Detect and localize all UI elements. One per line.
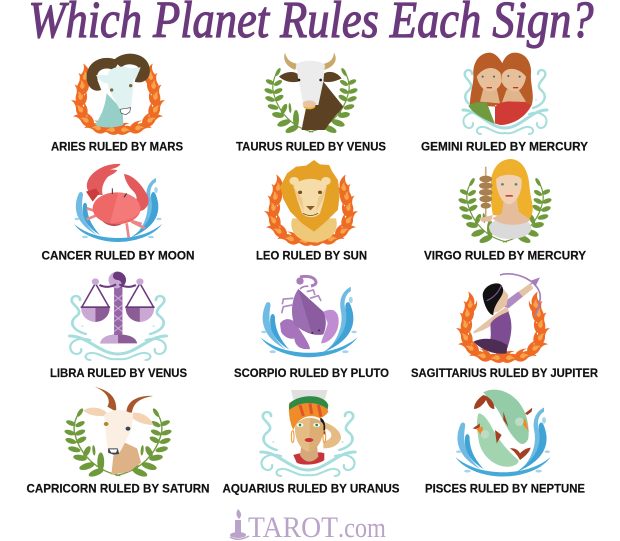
panel: libra <box>50 272 187 380</box>
wreath: water <box>261 287 357 357</box>
icon: two fish <box>473 390 532 467</box>
panel: sagittarius <box>411 274 598 380</box>
wreath: laurel <box>264 67 358 135</box>
panel: aquarius <box>222 390 400 496</box>
label: CANCER RULED BY MOON <box>42 249 194 263</box>
icon: ram <box>92 59 144 127</box>
icon: archer <box>473 274 540 354</box>
wreath: flames <box>263 174 359 247</box>
label: GEMINI RULED BY MERCURY <box>421 140 588 154</box>
wreath: swirls <box>70 296 166 360</box>
label: LEO RULED BY SUN <box>256 249 367 263</box>
icon: crab <box>86 164 149 237</box>
panel: virgo <box>424 159 586 263</box>
label: ARIES RULED BY MARS <box>51 140 183 154</box>
label: CAPRICORN RULED BY SATURN <box>26 482 210 496</box>
label: AQUARIUS RULED BY URANUS <box>222 482 400 496</box>
panel: cancer <box>42 164 194 263</box>
label: LIBRA RULED BY VENUS <box>50 366 187 380</box>
panel: aries <box>51 59 183 154</box>
panel: taurus <box>236 53 386 154</box>
icon: lion <box>280 160 340 242</box>
icon: candle <box>230 509 249 539</box>
label: SCORPIO RULED BY PLUTO <box>234 366 389 380</box>
wreath: flames <box>455 291 551 364</box>
panel: capricorn <box>26 387 210 496</box>
label: SAGITTARIUS RULED BY JUPITER <box>411 366 598 380</box>
icon: bull <box>279 53 343 130</box>
icon: water bearer <box>289 390 341 465</box>
panel: pisces <box>425 390 585 496</box>
panel: leo <box>256 160 367 263</box>
wreath: water <box>455 407 551 477</box>
wreath: laurel <box>458 177 552 245</box>
wreath: laurel <box>64 408 172 478</box>
icon: goat <box>83 387 153 475</box>
wreath: flames <box>70 63 166 136</box>
icon: scales <box>81 272 155 343</box>
icon: scorpion <box>280 276 339 349</box>
icon: maiden with wheat <box>479 159 533 239</box>
label: VIRGO RULED BY MERCURY <box>424 249 586 263</box>
panel: gemini <box>421 53 588 154</box>
wreath: water <box>74 178 162 242</box>
label: PISCES RULED BY NEPTUNE <box>425 482 585 496</box>
icon: twins <box>468 53 533 125</box>
logo: Tarot.com <box>230 509 386 541</box>
panel: scorpio <box>234 276 389 380</box>
wreath: swirls <box>261 412 355 476</box>
wreath: swirls <box>463 70 547 134</box>
label: TAURUS RULED BY VENUS <box>236 140 386 154</box>
